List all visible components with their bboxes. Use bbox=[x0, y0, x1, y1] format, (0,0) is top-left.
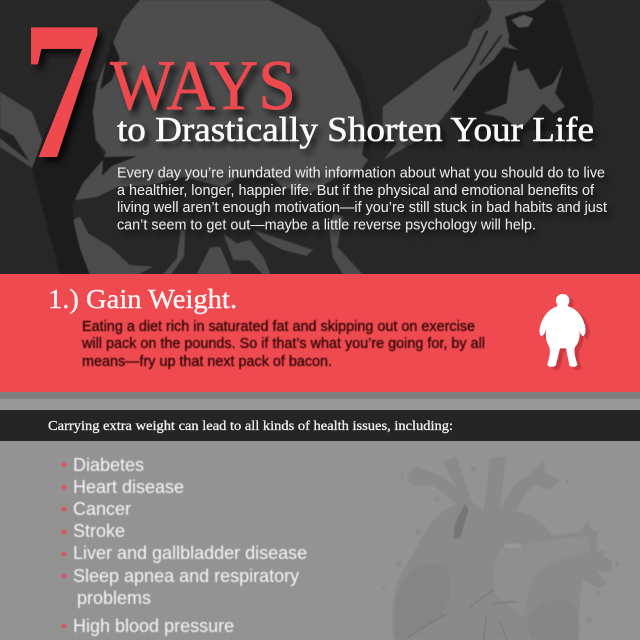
heart letter labels: G bbox=[435, 494, 441, 503]
panel: gain weight bbox=[0, 274, 640, 392]
intro paragraph: can’t seem to get out—maybe a little reverse psychology will help. bbox=[117, 218, 536, 234]
splatter bbox=[483, 60, 565, 130]
bone eye bbox=[505, 12, 537, 33]
panel: health issues background bbox=[0, 441, 640, 640]
list item: cancer: Cancer bbox=[73, 499, 131, 519]
skull and crossbones illustration bbox=[0, 0, 593, 275]
heart letter labels: K bbox=[397, 560, 403, 569]
heart letter labels: L bbox=[616, 559, 621, 568]
illustration: anatomical heart bbox=[382, 457, 621, 640]
list item: sleep apnea bbox=[62, 566, 299, 608]
opening bbox=[453, 503, 468, 538]
heart letter labels: I bbox=[566, 477, 569, 486]
heart letter labels: I bbox=[401, 472, 404, 481]
intro paragraph: a healthier, longer, happier life. But if the physical and emotional benefits of bbox=[117, 183, 595, 199]
eye shadow strip bbox=[102, 156, 138, 176]
heart letter labels: C bbox=[382, 583, 387, 592]
bullet list: health issues bbox=[62, 455, 307, 636]
heading: gain weight: 1.) Gain Weight. bbox=[48, 284, 237, 314]
lower chamber bbox=[527, 599, 579, 640]
list item: high blood pressure: High blood pressure bbox=[73, 616, 234, 636]
heart letter labels: H bbox=[471, 465, 477, 474]
heart letter labels: H bbox=[415, 527, 421, 536]
subtitle: to Drastically Shorten Your Life bbox=[117, 110, 594, 149]
list item: sleep apnea: Sleep apnea and respiratory bbox=[73, 566, 299, 586]
banner: health issues bbox=[0, 410, 640, 441]
separator bands bbox=[0, 392, 640, 410]
left branch bbox=[408, 467, 468, 513]
banner: health issues: Carrying extra weight can lead to all kinds of health issues, including: bbox=[48, 418, 453, 433]
title: WAYS: WAYS bbox=[110, 47, 296, 125]
dark area bbox=[450, 0, 593, 131]
intro paragraph: Every day you’re inundated with information about what you should do to live bbox=[117, 166, 605, 182]
left shadow bbox=[32, 78, 105, 274]
heart letter labels: F bbox=[597, 590, 601, 599]
paragraph: gain weight: means—fry up that next pack of bacon. bbox=[82, 354, 332, 370]
aortic highlight bbox=[493, 537, 592, 617]
paragraph: gain weight bbox=[81, 319, 485, 370]
left crossbone bbox=[0, 92, 46, 168]
paragraph: gain weight: will pack on the pounds. So if that’s what you’re going for, by all bbox=[81, 336, 485, 352]
list item: heart disease: Heart disease bbox=[73, 477, 184, 497]
heart letter labels bbox=[382, 465, 621, 625]
header background bbox=[0, 0, 640, 274]
intro paragraph bbox=[117, 166, 607, 234]
list item: diabetes: Diabetes bbox=[73, 455, 144, 475]
list item: liver and gallbladder disease: Liver and gallbladder disease bbox=[73, 543, 307, 563]
cranium bbox=[75, 0, 375, 200]
paragraph: gain weight: Eating a diet rich in saturated fat and skipping out on exercise bbox=[82, 319, 475, 335]
heart letter labels: D bbox=[587, 616, 592, 625]
list item: stroke: Stroke bbox=[73, 521, 125, 541]
right crossbone, dark area and splatter bbox=[383, 0, 593, 160]
intro paragraph: living well aren’t enough motivation—if you’re still stuck in bad habits and just bbox=[117, 200, 607, 216]
left chamber shade bbox=[395, 563, 450, 640]
heart body bbox=[392, 457, 612, 640]
lower skull streaks bbox=[73, 213, 363, 275]
bone cracks bbox=[453, 31, 487, 91]
cranium cracks bbox=[343, 60, 368, 100]
coronary vessels bbox=[407, 590, 553, 640]
icon: overweight figure bbox=[540, 294, 589, 370]
list item: sleep apnea: problems bbox=[77, 588, 151, 608]
